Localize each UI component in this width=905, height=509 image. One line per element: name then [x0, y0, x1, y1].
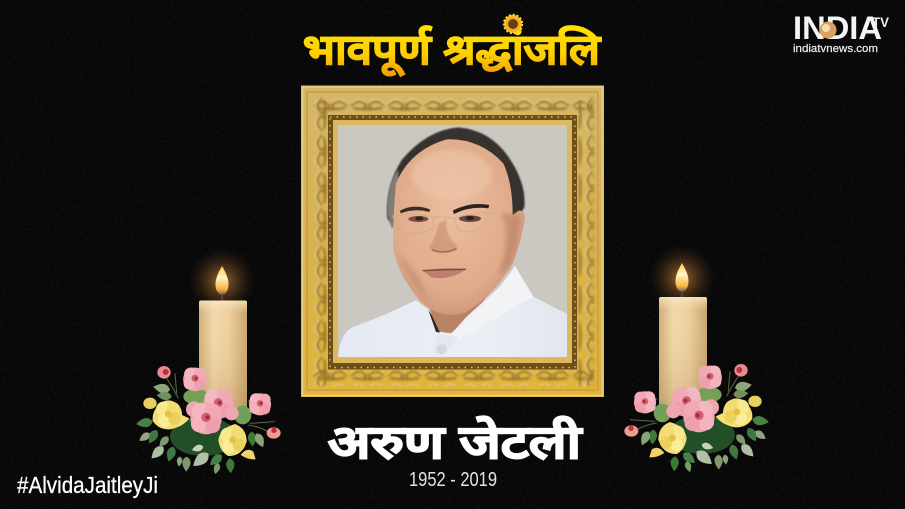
left flowers: [136, 366, 281, 475]
jacket: [338, 266, 567, 357]
logo: [793, 10, 890, 55]
frame ornament: top: [312, 96, 593, 111]
years: 1952 - 2019: [409, 469, 497, 491]
frame ornament: left: [312, 96, 327, 386]
hair: [387, 127, 525, 230]
beaded frame band: [328, 115, 577, 370]
icon: sunflower: [504, 15, 522, 33]
mouth: [423, 268, 466, 278]
logo wordmark: INDIA: [793, 10, 882, 46]
nose: [429, 220, 457, 253]
photo frame: [301, 86, 604, 397]
right flowers: [624, 364, 769, 473]
neck: [425, 263, 510, 333]
logo url: indiatvnews.com: [793, 43, 878, 55]
hashtag: #AlvidaJaitleyJi: [17, 472, 158, 498]
portrait photo: [338, 125, 567, 357]
right candle: [648, 244, 716, 407]
logo TV: TV: [872, 14, 890, 30]
eyes: [408, 216, 428, 222]
frame ornament: bottom: [312, 371, 593, 386]
face: [393, 139, 525, 315]
frame ornament: right: [579, 96, 594, 386]
title: भावपूर्ण श्रद्धांजलि: [303, 25, 602, 77]
glasses: [393, 210, 512, 234]
left candle: [188, 247, 256, 410]
eyebrows: [400, 207, 430, 213]
logo globe: [820, 22, 836, 38]
name: अरुण जेटली: [328, 416, 584, 468]
